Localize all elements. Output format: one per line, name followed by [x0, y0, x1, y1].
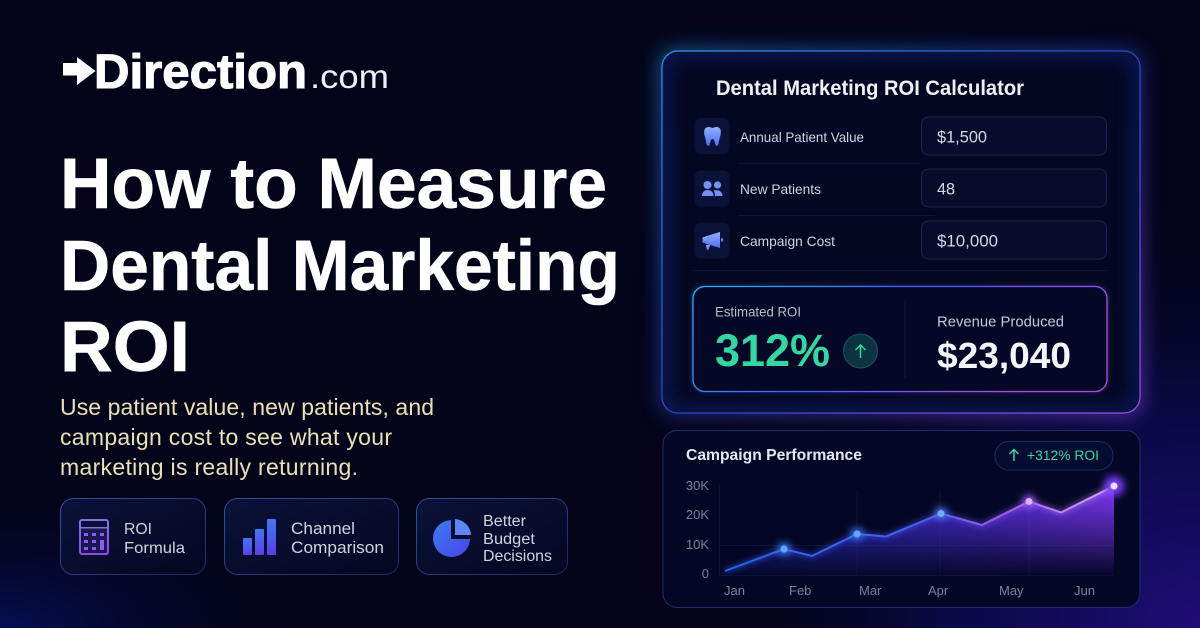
- panel: calculator: [658, 47, 1144, 417]
- chart axes: 20K: [686, 507, 709, 522]
- label: Comparison: [291, 539, 384, 557]
- input: [922, 169, 1106, 207]
- chart axes: 10K: [686, 537, 709, 552]
- title: ROI: [60, 308, 190, 387]
- label: [291, 520, 384, 557]
- chart axes: 30K: [686, 478, 709, 493]
- feature pill: ROI Formula: [60, 498, 206, 574]
- chart axes: May: [999, 583, 1024, 598]
- revenue produced: [937, 314, 1071, 376]
- subtitle: [60, 394, 434, 480]
- value: $10,000: [937, 232, 998, 250]
- chart axes: Jun: [1074, 583, 1095, 598]
- title: How to Measure: [60, 145, 607, 224]
- calculator heading: Dental Marketing ROI Calculator: [716, 77, 1024, 100]
- value: 48: [937, 180, 955, 198]
- revenue produced: $23,040: [937, 335, 1071, 376]
- label: Budget: [483, 531, 536, 548]
- label: Annual Patient Value: [740, 129, 864, 145]
- logo suffix: .com: [310, 58, 389, 95]
- icon: logo arrow: [63, 57, 96, 85]
- chart heading: Campaign Performance: [686, 447, 862, 464]
- estimated ROI: [715, 304, 878, 376]
- ROI badge: +312% ROI: [1027, 447, 1099, 463]
- label: ROI: [124, 521, 152, 538]
- logo wordmark: Direction: [94, 46, 307, 99]
- title: [60, 145, 620, 387]
- data points: [778, 476, 1124, 555]
- subtitle: Use patient value, new patients, and: [60, 394, 434, 420]
- icon: calculator: [80, 520, 108, 554]
- ROI badge: [995, 442, 1113, 470]
- chart axes: Feb: [789, 583, 811, 598]
- label: Channel: [291, 520, 355, 538]
- estimated ROI: Estimated ROI: [715, 304, 801, 320]
- icon: megaphone: [702, 232, 723, 250]
- row: new patients: [694, 169, 1106, 207]
- line chart: [725, 476, 1124, 575]
- panel: campaign performance: [663, 430, 1140, 608]
- icon: people: [702, 181, 722, 196]
- title: Dental Marketing: [60, 227, 620, 306]
- chart axes: Mar: [859, 583, 882, 598]
- row: campaign cost: [694, 221, 1106, 259]
- input: [922, 221, 1106, 259]
- row: annual patient value: [694, 117, 1106, 155]
- label: [483, 513, 552, 565]
- logo: [63, 46, 389, 99]
- estimated ROI: 312%: [715, 325, 830, 376]
- label: Formula: [124, 540, 185, 557]
- label: [124, 521, 185, 557]
- icon: pie chart: [433, 519, 471, 557]
- input: [922, 117, 1106, 155]
- chart axes: Apr: [928, 583, 949, 598]
- chart axes: Jan: [724, 583, 745, 598]
- icon: up arrow badge: [844, 334, 878, 368]
- feature pill: Better Budget Decisions: [416, 498, 568, 574]
- result box: [693, 286, 1107, 392]
- icon: tooth: [704, 127, 721, 146]
- label: Better: [483, 513, 526, 530]
- chart axes: [686, 478, 1095, 598]
- feature pill: Channel Comparison: [224, 498, 398, 574]
- chart axes: 0: [702, 566, 709, 581]
- revenue produced: Revenue Produced: [937, 314, 1064, 330]
- icon: bar chart: [243, 519, 276, 555]
- subtitle: campaign cost to see what your: [60, 424, 392, 450]
- value: $1,500: [937, 128, 987, 146]
- label: Decisions: [483, 548, 552, 565]
- subtitle: marketing is really returning.: [60, 454, 358, 480]
- label: Campaign Cost: [740, 233, 835, 249]
- label: New Patients: [740, 181, 821, 197]
